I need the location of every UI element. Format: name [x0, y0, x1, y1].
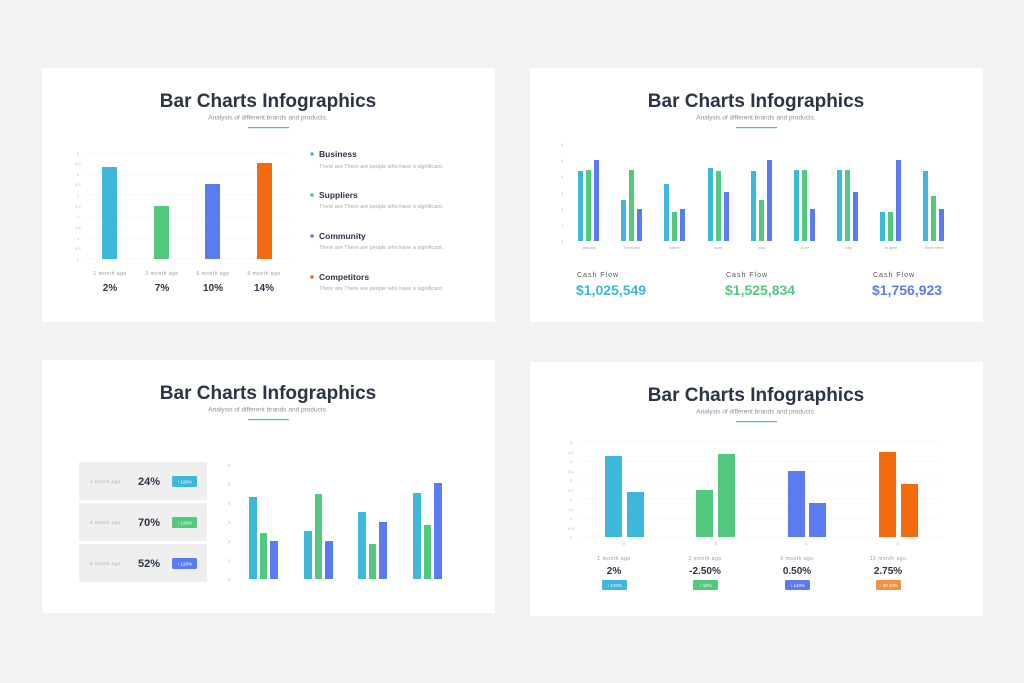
bar chart [561, 142, 944, 250]
bar chart: 4 [77, 172, 80, 177]
legend: Business [319, 149, 357, 159]
bar chart: 5 [561, 158, 564, 163]
legend: Suppliers [319, 190, 358, 200]
bar chart: 0.5 [568, 526, 574, 531]
bar chart: April [714, 245, 722, 250]
bar chart: 2 [561, 207, 564, 212]
stats: 2% [607, 566, 621, 577]
labels: 14% [254, 283, 274, 294]
title [160, 91, 376, 128]
stats: 12 month ago [870, 556, 906, 562]
bar chart: 1 [77, 236, 80, 241]
title: Analysis of different brands and products. [208, 406, 328, 414]
stats: ↑ 34.14% [879, 583, 898, 588]
stat rows: ↑ 120% [177, 480, 192, 484]
bar chart: 2.5 [568, 488, 574, 493]
bar chart: 1 [228, 558, 231, 563]
title [648, 91, 864, 128]
legend: There are There are people who have a significant. [319, 286, 444, 292]
stat rows: ↑ 120% [177, 562, 192, 566]
bar chart: 1 [561, 223, 564, 228]
labels: 6 month ago [196, 271, 230, 277]
cash flow stats: Cash Flow [726, 272, 768, 279]
stat rows: 52% [138, 558, 160, 570]
stats: ↑ 15% [699, 583, 712, 588]
bar chart: 2.5 [75, 204, 81, 209]
title: Analysis of different brands and products. [696, 408, 816, 416]
stats: 1 month ago [597, 556, 631, 562]
bar chart: 5 [228, 482, 231, 487]
labels: 3 month ago [145, 271, 179, 277]
bar chart: 1.5 [568, 507, 574, 512]
title: Bar Charts Infographics [160, 91, 376, 112]
stat rows: 3 month ago [90, 520, 121, 525]
bar chart: 6 [228, 463, 231, 468]
stats: 3 month ago [688, 556, 722, 562]
labels: 7% [155, 283, 169, 294]
stat rows: 6 month ago [90, 561, 121, 566]
bar chart: 0 [77, 257, 80, 262]
legend: Community [319, 231, 366, 241]
legend: There are There are people who have a significant. [319, 204, 444, 210]
title: Bar Charts Infographics [160, 383, 376, 404]
legend: There are There are people who have a significant. [319, 245, 444, 251]
stats [597, 556, 906, 590]
bar chart: 5 [77, 151, 80, 156]
title [160, 383, 376, 420]
bar chart: 3 [228, 520, 231, 525]
bar chart: 3.5 [75, 182, 81, 187]
bar chart: 0 [561, 239, 564, 244]
stats: 0.50% [783, 566, 811, 577]
stat rows: 1 month ago [90, 479, 121, 484]
bar chart: B [715, 541, 718, 546]
bar chart: D [897, 541, 900, 546]
stat rows: ↑ 120% [177, 520, 192, 526]
bar chart: 6 [561, 142, 564, 147]
stat rows: 24% [138, 476, 160, 488]
bar chart: 1.5 [75, 225, 81, 230]
bar chart: May [758, 245, 766, 250]
panel: bottom-right paired bars [530, 362, 983, 616]
stats: ↑ 120% [607, 583, 622, 588]
title: Bar Charts Infographics [648, 385, 864, 406]
title [648, 385, 864, 422]
cash flow stats: $1,025,549 [576, 282, 646, 298]
bar chart [568, 440, 942, 546]
stat rows: 70% [138, 517, 160, 529]
labels: 1 month ago [93, 271, 127, 277]
bar chart [75, 151, 290, 262]
panel: bottom-left stat rows + chart [42, 360, 495, 613]
bar chart: September [924, 245, 944, 250]
bar chart: 2 [77, 214, 80, 219]
cash flow stats: $1,756,923 [872, 282, 942, 298]
cash flow stats: $1,525,834 [725, 282, 795, 298]
bar chart: 0 [570, 535, 573, 540]
panel: top-left legend chart [42, 68, 495, 322]
bar chart: 0 [228, 577, 231, 582]
stats: 2.75% [874, 566, 902, 577]
bar chart: 3 [570, 478, 573, 483]
bar chart: 4.5 [75, 161, 81, 166]
labels: 10% [203, 283, 223, 294]
bar chart: 3.5 [568, 469, 574, 474]
bar chart: January [582, 245, 596, 250]
labels: 9 month ago [247, 271, 281, 277]
legend [310, 149, 444, 292]
stat rows [79, 462, 207, 582]
cash flow stats: Cash Flow [873, 272, 915, 279]
bar chart: A [623, 541, 626, 546]
bar chart: June [801, 245, 810, 250]
title: Analysis of different brands and products. [208, 114, 328, 122]
bar chart [228, 463, 442, 582]
bar chart: 3 [561, 191, 564, 196]
cash flow stats [576, 272, 942, 298]
bar chart: July [844, 245, 852, 250]
bar chart: C [806, 541, 809, 546]
bar chart: August [885, 245, 898, 250]
panel: top-right monthly chart [530, 68, 983, 322]
bar chart: February [624, 245, 640, 250]
bar chart: 4 [228, 501, 231, 506]
bar chart: 5 [570, 440, 573, 445]
labels: 2% [103, 283, 117, 294]
bar chart: 0.5 [75, 246, 81, 251]
labels [93, 271, 281, 294]
bar chart: 3 [77, 193, 80, 198]
bar chart: 4 [561, 174, 564, 179]
bar chart: 2 [570, 497, 573, 502]
legend: There are There are people who have a significant. [319, 164, 444, 170]
cash flow stats: Cash Flow [577, 272, 619, 279]
stats: 6 month ago [780, 556, 814, 562]
bar chart: 4 [570, 459, 573, 464]
stats: -2.50% [689, 566, 721, 577]
bar chart: March [669, 245, 681, 250]
title: Bar Charts Infographics [648, 91, 864, 112]
stats: ↑ 140% [790, 583, 805, 588]
legend: Competitors [319, 272, 369, 282]
bar chart: 2 [228, 539, 231, 544]
title: Analysis of different brands and products. [696, 114, 816, 122]
bar chart: 1 [570, 516, 573, 521]
bar chart: 4.5 [568, 450, 574, 455]
